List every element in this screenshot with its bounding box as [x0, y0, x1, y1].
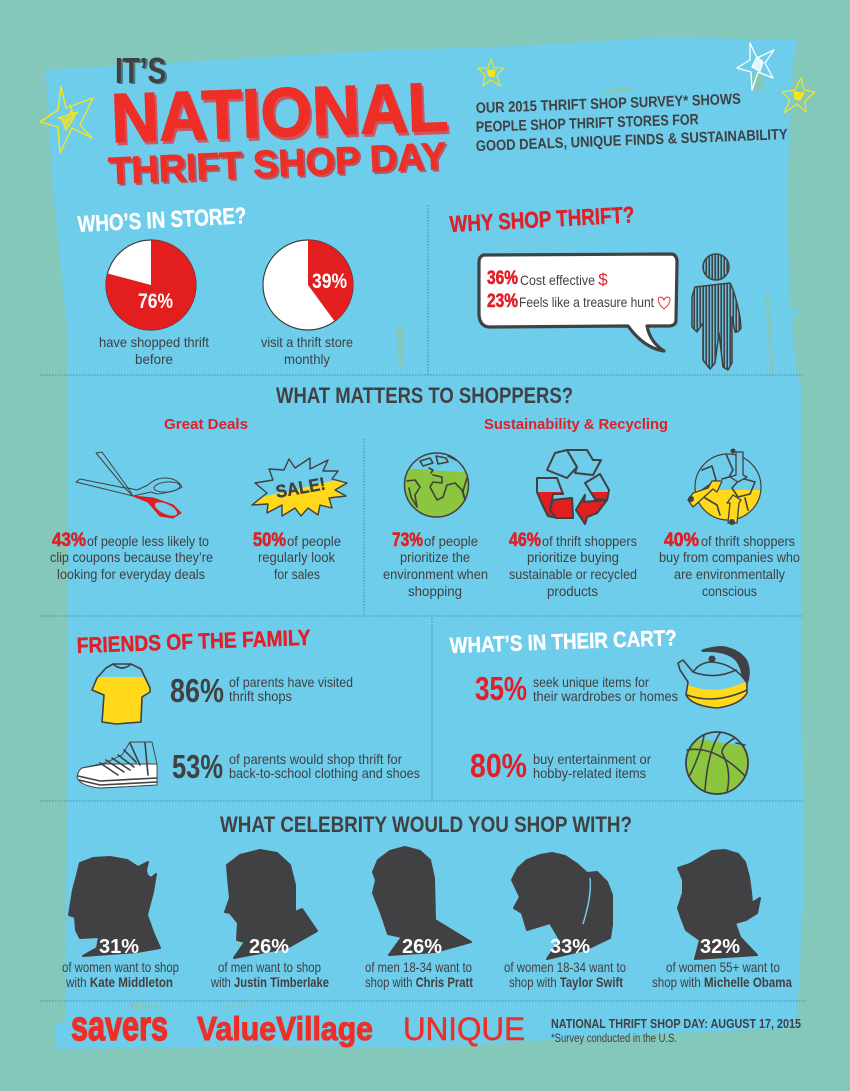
stat: 80%: 80%: [470, 747, 527, 784]
icon: sale starburst: SALE!: [274, 474, 327, 502]
intro text: GOOD DEALS, UNIQUE FINDS & SUSTAINABILITY: [476, 126, 788, 155]
stat: 86% of parents: 86%: [170, 672, 224, 709]
stat: sales: [253, 530, 341, 582]
caption: Michelle Obama: [652, 959, 792, 990]
title: THRIFT SHOP DAY: [108, 136, 447, 193]
title: IT’S: [117, 51, 168, 92]
icon: recycling arrows: [537, 450, 609, 524]
icon: scissors: [76, 452, 182, 519]
icon: sneaker: [77, 742, 157, 788]
stat: environment: environment when: [383, 566, 488, 582]
stat: recycled: [509, 530, 637, 599]
silhouette: Justin Timberlake: [225, 850, 317, 958]
speech bubble: 23%: [487, 291, 518, 312]
stat: 35%: 35%: [475, 670, 527, 707]
icon: recycling globe: [688, 448, 761, 525]
stat: 86% of parents: of parents have visited: [229, 674, 353, 690]
caption: Michelle Obama: shop with Michelle Obama: [652, 974, 792, 990]
logo: Savers: savers: [71, 1002, 168, 1049]
silhouette: Justin Timberlake: 26%: [249, 936, 289, 958]
speech bubble: $: [598, 270, 608, 289]
stat: environment: of people: [424, 533, 478, 549]
silhouette: Kate Middleton: [69, 857, 160, 958]
subheading: great deals: Great Deals: [164, 416, 248, 433]
title: THRIFT SHOP DAY: [110, 138, 449, 195]
stat: 53% of parents: [172, 748, 420, 785]
stat: 53% of parents: 53%: [172, 748, 223, 785]
stat: conscious: of thrift shoppers: [701, 533, 795, 549]
speech bubble: 36%: [487, 268, 518, 289]
stat: sales: 50%: [253, 530, 286, 551]
stat: conscious: buy from companies who: [659, 549, 800, 565]
pie caption: monthly: monthly: [284, 351, 330, 367]
speech bubble: Cost effective: [520, 272, 595, 288]
stat: 35%: seek unique items for: [533, 674, 649, 690]
star: small yellow top: [478, 59, 504, 86]
pie chart: 76%: [106, 240, 196, 330]
stat: coupons: [50, 530, 213, 582]
silhouette: Chris Pratt: [373, 847, 471, 958]
pie caption: monthly: visit a thrift store: [261, 334, 353, 350]
star: yellow right: [782, 78, 815, 113]
icon: t-shirt: [92, 664, 150, 724]
silhouette: Michelle Obama: 32%: [700, 936, 740, 958]
heading: what's in their cart: WHAT’S IN THEIR CART?: [449, 625, 677, 658]
stat: 80%: hobby-related items: [533, 765, 646, 781]
caption: Taylor Swift: [504, 959, 626, 990]
stat: recycled: products: [547, 583, 598, 599]
pie caption: shopped before: have shopped thrift: [99, 334, 209, 350]
stat: conscious: conscious: [702, 583, 757, 599]
pie caption: shopped before: before: [135, 351, 173, 367]
caption: Chris Pratt: of men 18-34 want to: [365, 959, 472, 975]
pie caption: monthly: [261, 334, 353, 367]
icon: sale starburst: [252, 458, 347, 516]
heading: friends of the family: FRIENDS OF THE FAMILY: [76, 625, 311, 658]
stat: coupons: 43%: [52, 530, 86, 551]
stat: conscious: 40%: [664, 530, 699, 551]
stat: 53% of parents: back-to-school clothing and shoes: [229, 765, 420, 781]
subheading: sustainability: Sustainability & Recycling: [484, 416, 668, 433]
stat: recycled: sustainable or recycled: [509, 566, 637, 582]
caption: Chris Pratt: [365, 959, 473, 990]
stat: 86% of parents: [170, 672, 353, 709]
silhouette: Kate Middleton: 31%: [99, 936, 139, 958]
stat: coupons: clip coupons because they’re: [50, 549, 213, 565]
icon: green globe: [404, 453, 468, 517]
title: IT’S: [115, 50, 166, 91]
stat: environment: prioritize the: [400, 549, 470, 565]
pie chart: 39%: [263, 240, 353, 330]
intro text: PEOPLE SHOP THRIFT STORES FOR: [476, 111, 699, 136]
stat: sales: of people: [287, 533, 341, 549]
silhouette: Taylor Swift: [512, 853, 612, 959]
stat: sales: regularly look: [258, 549, 336, 565]
paint gaps in panel: [130, 72, 774, 1009]
heading: what matters: WHAT MATTERS TO SHOPPERS?: [276, 383, 573, 408]
title: [108, 50, 451, 195]
caption: Justin Timberlake: with Justin Timberlake: [210, 974, 329, 990]
speech bubble: Feels like a treasure hunt: [519, 294, 654, 310]
icon: striped person: [692, 254, 741, 370]
stat: recycled: prioritize buying: [527, 549, 619, 565]
speech bubble: [479, 254, 677, 351]
stat: 80%: [470, 747, 651, 784]
caption: Kate Middleton: with Kate Middleton: [65, 974, 173, 990]
caption: Chris Pratt: shop with Chris Pratt: [365, 974, 473, 990]
silhouette: Taylor Swift: 33%: [550, 936, 590, 958]
caption: Justin Timberlake: [210, 959, 329, 990]
icon: kettle: [678, 646, 750, 708]
footnote: *Survey conducted in the U.S.: [551, 1033, 677, 1045]
pie chart: 76%: 76%: [138, 290, 173, 313]
heading: why shop thrift: WHY SHOP THRIFT?: [449, 201, 635, 237]
heading: what celebrity: WHAT CELEBRITY WOULD YOU SHOP WITH?: [220, 812, 632, 837]
star: white top right: [737, 43, 774, 90]
stat: 80%: buy entertainment or: [533, 751, 651, 767]
stat: conscious: are environmentally: [674, 566, 785, 582]
silhouette: Michelle Obama: [678, 850, 760, 959]
title: NATIONAL: [110, 68, 449, 157]
caption: Taylor Swift: of women 18-34 want to: [504, 959, 626, 975]
pie caption: shopped before: [99, 334, 209, 367]
logo: Unique: UNIQUE: [403, 1011, 525, 1047]
stat: environment: shopping: [408, 583, 462, 599]
star: large yellow left: [40, 87, 93, 153]
caption: Kate Middleton: of women want to shop: [62, 959, 179, 975]
stat: conscious: [659, 530, 800, 599]
title: NATIONAL: [112, 71, 451, 160]
caption: Taylor Swift: shop with Taylor Swift: [509, 974, 623, 990]
footer date: NATIONAL THRIFT SHOP DAY: AUGUST 17, 2015: [551, 1016, 801, 1031]
stat: coupons: looking for everyday deals: [57, 566, 205, 582]
logo: Value Village: ValueVillage: [197, 1010, 373, 1047]
stat: environment: 73%: [392, 530, 423, 551]
intro text: OUR 2015 THRIFT SHOP SURVEY* SHOWS: [476, 91, 741, 117]
silhouette: Chris Pratt: 26%: [402, 936, 442, 958]
stat: recycled: of thrift shoppers: [542, 533, 637, 549]
icon: basketball: [685, 731, 749, 795]
stat: recycled: 46%: [509, 530, 541, 551]
heading: who's in store: WHO’S IN STORE?: [77, 202, 247, 237]
caption: Kate Middleton: [62, 959, 179, 990]
caption: Michelle Obama: of women 55+ want to: [666, 959, 780, 975]
stat: 35%: [475, 670, 678, 707]
stat: environment: [383, 530, 488, 599]
stat: 53% of parents: of parents would shop thrift for: [229, 751, 402, 767]
stat: 35%: their wardrobes or homes: [533, 688, 678, 704]
stat: sales: for sales: [274, 566, 320, 582]
stat: coupons: of people less likely to: [87, 533, 209, 549]
intro text: [476, 91, 788, 155]
caption: Justin Timberlake: of men want to shop: [218, 959, 321, 975]
stat: 86% of parents: thrift shops: [229, 688, 292, 704]
pie chart: 39%: 39%: [312, 270, 347, 293]
